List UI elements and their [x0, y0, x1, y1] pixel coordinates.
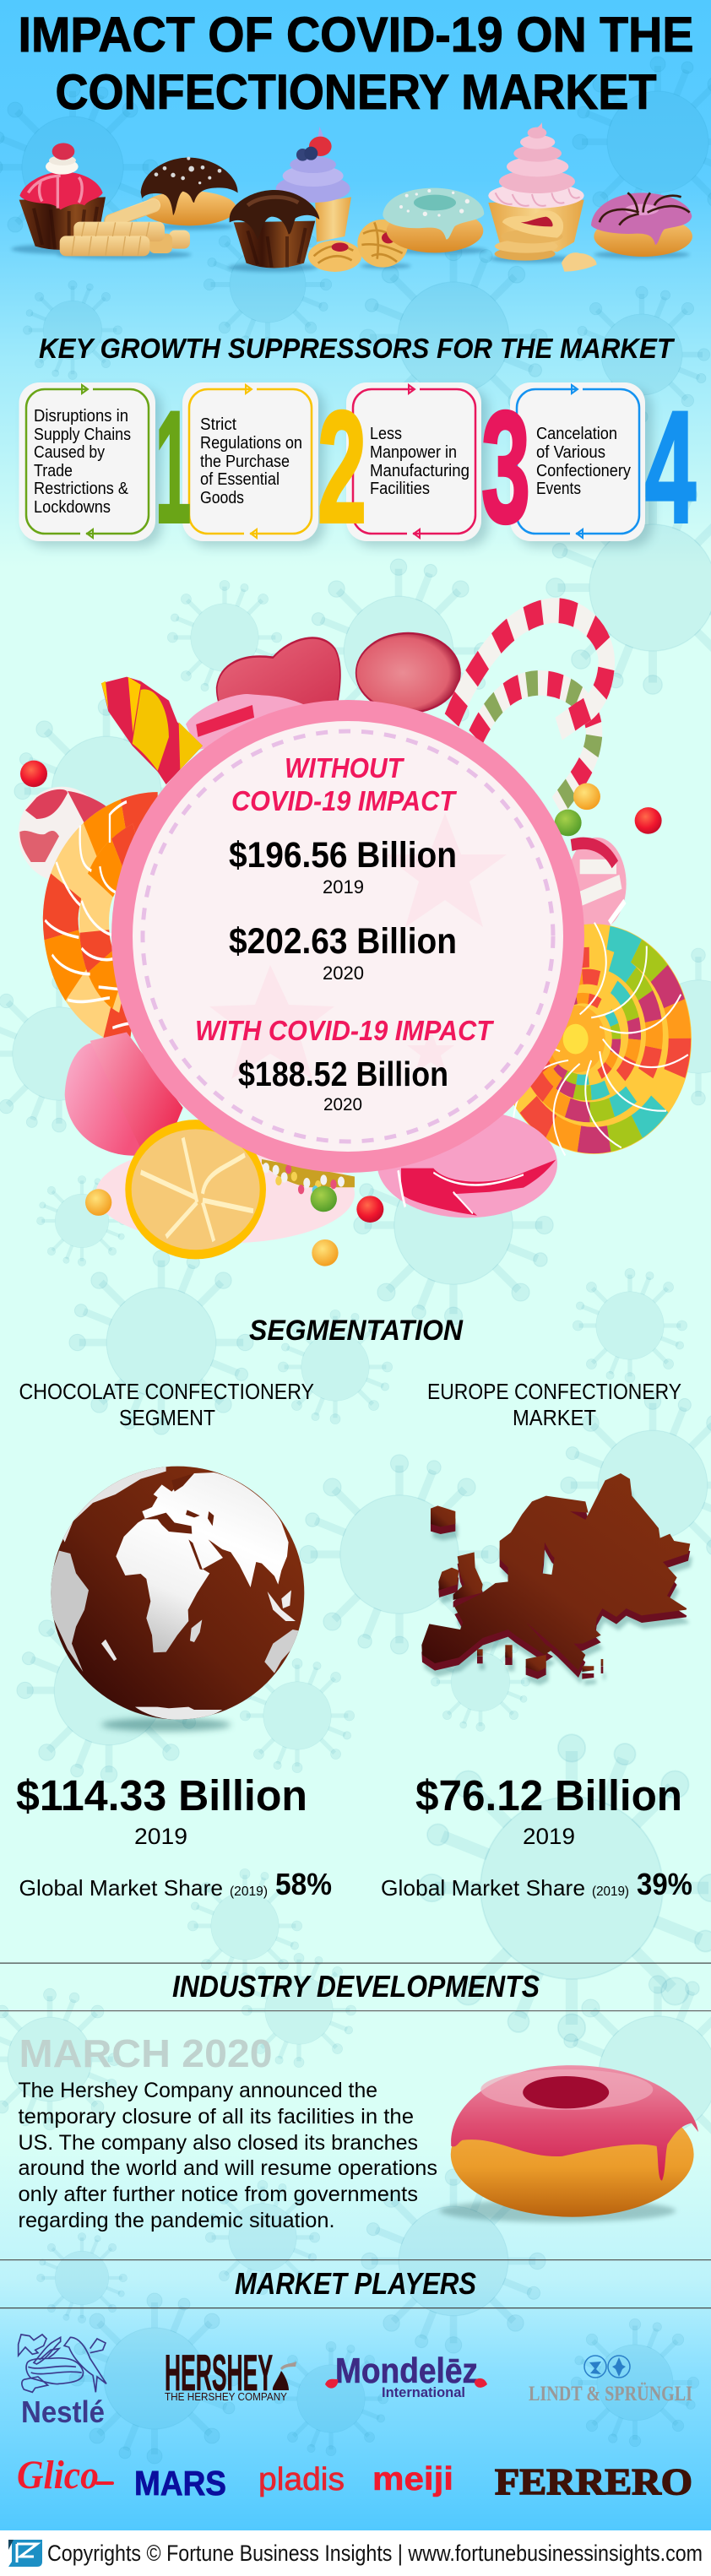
- card 2: strict regulations: the Purchase: [200, 453, 290, 471]
- icon: nest and birds: [19, 2335, 106, 2392]
- stat: europe share: 39%: [637, 1867, 692, 1901]
- icon: europe map: [421, 1473, 692, 1685]
- card 2: strict regulations: Regulations on: [200, 434, 302, 453]
- text: paragraph: The Hershey Company announced the: [19, 2079, 377, 2102]
- text: europe heading: MARKET: [513, 1405, 596, 1430]
- logo: Glico: Glico: [17, 2453, 99, 2497]
- text: paragraph: around the world and will resume operations: [19, 2156, 437, 2180]
- card 1: supply chains: Disruptions in: [34, 407, 128, 426]
- footer: [0, 2530, 711, 2576]
- title: IMPACT OF COVID-19 ON THE: [19, 8, 694, 62]
- text: paragraph: US. The company also closed its branches: [19, 2131, 418, 2155]
- stat: 2020 with impact: [238, 1055, 448, 1114]
- icon: fortune business insights logo: [8, 2540, 42, 2567]
- text: europe heading: [427, 1379, 681, 1430]
- icon: heart cookies: [495, 210, 597, 272]
- card 3: less manpower: Manpower in: [370, 443, 457, 462]
- orange ball left: [85, 1189, 111, 1216]
- number 2: 2: [318, 378, 366, 556]
- icon: chocolate muffin: [230, 190, 319, 268]
- text: europe heading: EUROPE CONFECTIONERY: [427, 1379, 681, 1404]
- logo: Hershey: THE HERSHEY COMPANY: [165, 2390, 287, 2403]
- text: chocolate year: 2019: [134, 1824, 187, 1849]
- number 3: 3: [481, 378, 530, 556]
- text: paragraph: only after further notice from governments: [19, 2183, 418, 2206]
- card 4: cancelation of events: Confectionery: [536, 462, 631, 480]
- card 2: strict regulations: of Essential: [200, 470, 280, 489]
- card 3: less manpower: Less: [370, 425, 402, 443]
- logo: Pladis: pladis: [258, 2462, 345, 2497]
- red ball right: [635, 807, 662, 834]
- round red candy: [356, 633, 460, 713]
- card 3: less manpower: Manufacturing: [370, 462, 469, 480]
- stat: europe share: Global Market Share: [381, 1875, 585, 1901]
- pink backdrop: [95, 1144, 355, 1244]
- stat: chocolate share: (2019): [230, 1885, 268, 1899]
- logo: Nestle: Nestlé: [21, 2394, 105, 2429]
- illustration: row of confectionery: [11, 122, 692, 272]
- card 1: supply chains: Restrictions &: [34, 480, 129, 498]
- stat: chocolate value: $114.33 Billion: [16, 1771, 307, 1819]
- stat: chocolate share: 58%: [275, 1867, 332, 1901]
- text: paragraph: regarding the pandemic situation.: [19, 2209, 334, 2232]
- icon: purple donut: [591, 193, 692, 257]
- heading: segmentation: SEGMENTATION: [249, 1315, 464, 1347]
- icon: teal donut: [383, 188, 484, 252]
- red ball bottom: [356, 1196, 383, 1223]
- title: [19, 8, 694, 120]
- logo: Ferrero: FERRERO: [495, 2461, 692, 2503]
- logo: Mondelez: Mondelēz: [335, 2351, 478, 2390]
- card 1: supply chains: Caused by: [34, 443, 105, 462]
- card 1: supply chains: Trade: [34, 462, 73, 480]
- card 1: supply chains: [19, 382, 162, 547]
- icon: chocolate donut: [141, 157, 238, 225]
- icon: butter cookie swirl: [357, 220, 408, 268]
- text: with covid-19 heading: WITH COVID-19 IMPACT: [195, 1015, 495, 1046]
- pink ring candy: [186, 694, 310, 750]
- twisted candy: [101, 677, 203, 784]
- text: chocolate heading: SEGMENT: [119, 1405, 215, 1430]
- stat: 2020: $202.63 Billion: [229, 921, 457, 962]
- stat: 2019: $196.56 Billion: [229, 835, 457, 876]
- text: without covid-19 heading: [231, 752, 458, 816]
- pink red lollipop: [377, 1110, 557, 1217]
- green ball: [555, 810, 582, 836]
- text: chocolate heading: [19, 1379, 314, 1430]
- icon: red cupcake: [19, 143, 106, 251]
- panel: chocolate segment: [16, 1379, 332, 1901]
- candy cane with red stripes: [452, 610, 606, 729]
- stat: 2020 with impact: $188.52 Billion: [238, 1055, 448, 1093]
- text: paragraph: [19, 2079, 437, 2232]
- sprinkles: [262, 1159, 355, 1195]
- card 4: cancelation of events: [510, 382, 653, 547]
- pink striped ball: [567, 838, 627, 930]
- card 3: less manpower: Facilities: [370, 480, 430, 498]
- heading: market players: MARKET PLAYERS: [235, 2266, 476, 2301]
- card 1: supply chains: Lockdowns: [34, 498, 111, 517]
- stat: 2019: 2019: [323, 876, 364, 898]
- logo: Nestle: [19, 2335, 106, 2429]
- panel: europe market: [381, 1379, 692, 1901]
- candy cane with green stripes: [475, 683, 594, 806]
- panel: industry development text: [19, 2031, 437, 2232]
- heart candy: [217, 638, 340, 716]
- logo: Mondelez: International: [382, 2384, 465, 2400]
- logo: Hershey: [165, 2345, 296, 2403]
- text: paragraph: temporary closure of all its facilities in the: [19, 2105, 414, 2129]
- card 1: supply chains: Supply Chains: [34, 426, 131, 444]
- logo: Hershey: HERSHEY: [165, 2345, 273, 2401]
- panel: market size circle: [111, 700, 584, 1173]
- logo: Meiji: meiji: [372, 2461, 453, 2497]
- red ball: [20, 761, 47, 787]
- heading: key growth suppressors: KEY GROWTH SUPPRESSORS FOR THE MARKET: [39, 333, 676, 364]
- logo: Lindt and Sprungli: [529, 2356, 692, 2405]
- card 4: cancelation of events: of Various: [536, 443, 605, 462]
- text: without covid-19 heading: COVID-19 IMPACT: [231, 785, 458, 816]
- icon: wafer rolls: [60, 205, 190, 256]
- pink half ball: [65, 1033, 183, 1156]
- swirl lollipop: [19, 787, 108, 881]
- illustration: candy surround: [19, 610, 692, 1266]
- stat: chocolate share: Global Market Share: [19, 1875, 223, 1901]
- card 2: strict regulations: [182, 382, 325, 547]
- orange ball bottom: [312, 1239, 339, 1266]
- stat: 2019: [229, 835, 457, 898]
- text: date: MARCH 2020: [19, 2031, 272, 2075]
- stat: europe value: $76.12 Billion: [415, 1771, 682, 1819]
- orange striped ring candy: [45, 802, 158, 1028]
- stat: chocolate share: [19, 1867, 332, 1901]
- stat: europe share: [381, 1867, 692, 1901]
- card 2: strict regulations: Strict: [200, 415, 236, 434]
- orange slice: [125, 1120, 266, 1259]
- orange ball: [573, 784, 600, 810]
- stat: 2020: 2020: [323, 963, 364, 984]
- icon: purple cupcake: [276, 127, 351, 242]
- rainbow lollipop: [471, 923, 692, 1156]
- card 4: cancelation of events: Cancelation: [536, 425, 617, 443]
- card 2: strict regulations: Goods: [200, 489, 244, 507]
- icon: butter cookie: [308, 241, 361, 272]
- text: chocolate heading: CHOCOLATE CONFECTIONERY: [19, 1379, 314, 1404]
- icon: chocolate globe: [48, 1461, 307, 1732]
- text: without covid-19 heading: WITHOUT: [285, 752, 405, 784]
- icon: pink cupcake: [488, 122, 584, 252]
- icon: strawberry donut: [440, 2065, 698, 2222]
- green ball: [311, 1186, 337, 1212]
- text: 1: [155, 378, 191, 556]
- logo: Mars: MARS: [134, 2464, 226, 2503]
- heading: industry developments: INDUSTRY DEVELOPMENTS: [172, 1969, 540, 2004]
- title: CONFECTIONERY MARKET: [56, 65, 657, 120]
- card 3: less manpower: [346, 382, 489, 547]
- text: europe year: 2019: [523, 1824, 575, 1849]
- card 4: cancelation of events: Events: [536, 480, 581, 498]
- stat: 2020: [229, 921, 457, 984]
- stat: europe share: (2019): [592, 1885, 629, 1899]
- stat: 2020 with impact: 2020: [323, 1095, 362, 1114]
